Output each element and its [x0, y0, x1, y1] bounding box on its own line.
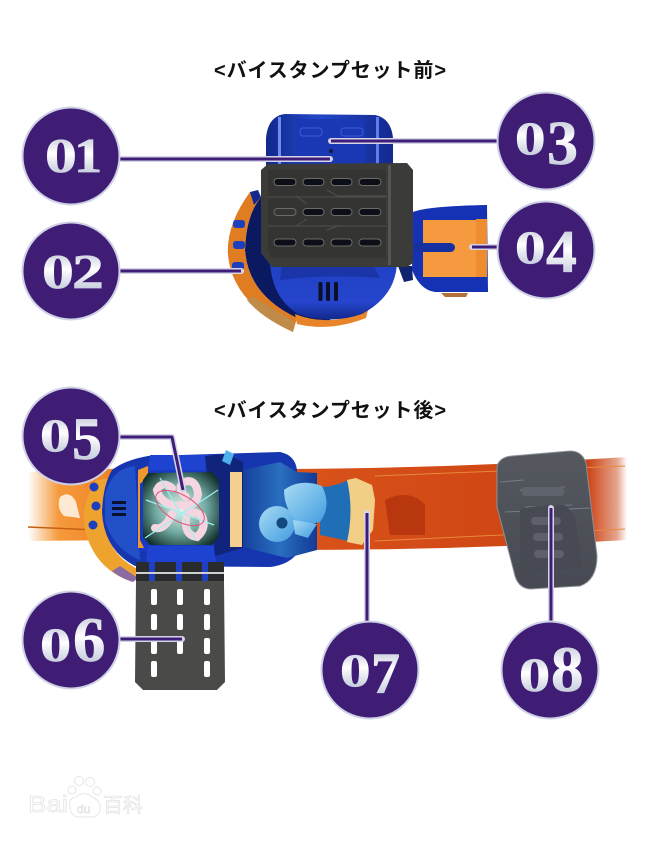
stamp neck	[320, 479, 352, 542]
badge 07	[322, 622, 418, 718]
badge 01: 0	[45, 129, 77, 183]
leader line 03	[331, 138, 497, 144]
dark inner recess	[245, 197, 330, 322]
leader line 04	[472, 244, 497, 250]
badge 01	[22, 108, 120, 204]
ice blue stamp head	[259, 483, 327, 542]
badge 03	[498, 92, 594, 190]
badge 02	[22, 222, 120, 320]
badge 06	[22, 592, 120, 688]
leader line 06	[120, 636, 182, 642]
blue body	[102, 450, 300, 567]
badge 07: 0	[340, 644, 371, 696]
badge 08: 8	[551, 634, 584, 706]
blue back cover	[266, 114, 393, 170]
belt clip	[497, 451, 597, 589]
badge 07: 7	[371, 641, 400, 706]
leader line 01	[120, 156, 330, 162]
badge 01: 1	[74, 129, 102, 183]
orange side arc	[228, 190, 297, 332]
heading: before stamp set: <バイスタンプセット前>	[214, 59, 446, 82]
yellow side arc	[84, 478, 140, 582]
grey fold-out plate	[135, 562, 225, 690]
device: after stamp set	[84, 450, 375, 582]
watermark: Baidu logo: du	[77, 802, 90, 816]
badge 03: 0	[515, 112, 546, 164]
stamp screen	[143, 472, 219, 545]
cream strip	[230, 472, 242, 547]
badge 02: 2	[72, 245, 104, 299]
badge 02: 0	[42, 245, 74, 299]
leader line 07	[364, 513, 370, 622]
watermark: Baidu logo	[28, 776, 143, 817]
device: before stamp set	[228, 114, 488, 332]
cream stamp grip	[347, 478, 375, 545]
leader line 08	[548, 508, 554, 622]
badge 05: 0	[40, 409, 71, 461]
heading: after stamp set: <バイスタンプセット後>	[214, 399, 446, 422]
badge 04: 0	[515, 221, 546, 273]
watermark: Baidu logo: Bai	[28, 791, 68, 817]
leader line 02	[120, 268, 241, 274]
watermark: Baidu logo: 百科	[103, 794, 143, 817]
belt strap	[28, 457, 627, 550]
badge 04: 4	[546, 220, 577, 286]
badge 04	[498, 202, 594, 298]
leader line 05	[118, 437, 183, 490]
black stamp plate	[261, 163, 413, 267]
badge 08	[502, 622, 598, 718]
round body with vents	[270, 262, 413, 327]
badge 05: 5	[72, 406, 102, 472]
badge 06: 6	[73, 605, 105, 675]
translucent blue stamp body	[243, 462, 317, 558]
badge 03: 3	[547, 110, 578, 178]
badge 08: 0	[519, 649, 550, 702]
right blue tab with orange insert	[412, 205, 488, 297]
badge 05	[22, 388, 120, 484]
badge 06: 0	[40, 619, 71, 672]
